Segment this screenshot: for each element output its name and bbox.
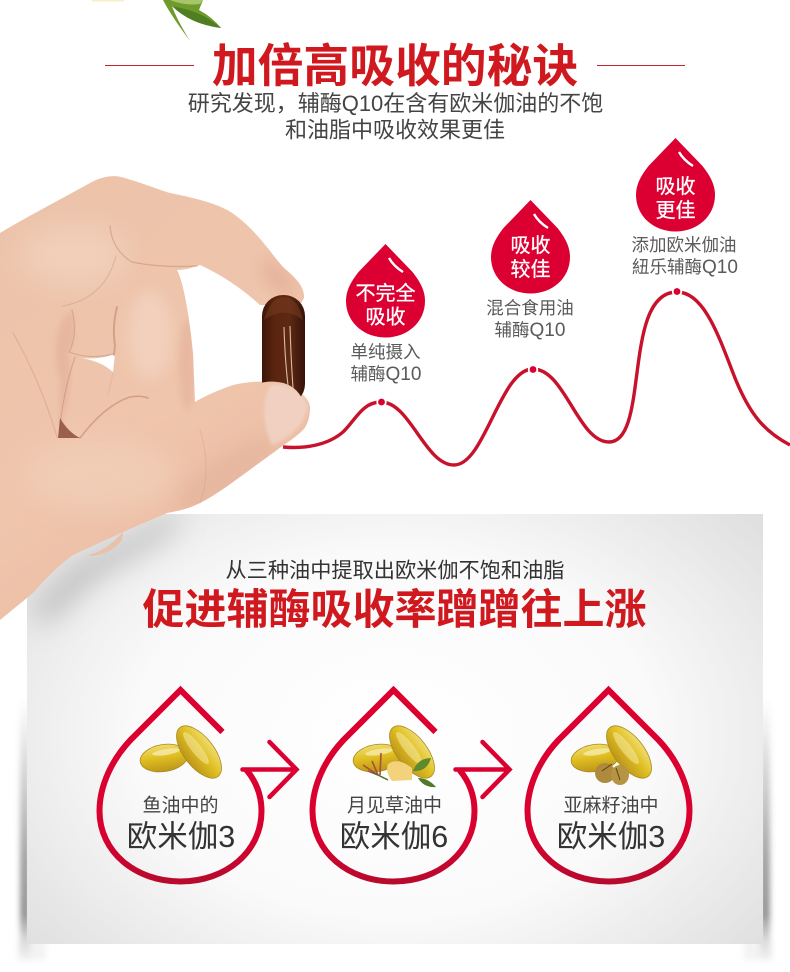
heading: absorption rises: 促进辅酶吸收率蹭蹭往上涨 bbox=[142, 586, 647, 633]
badge drop: better absorption: 较佳 bbox=[510, 258, 550, 281]
label: with omega oil bbox=[632, 235, 738, 278]
omega type: 欧米伽3 bbox=[557, 820, 665, 854]
badge drop: best absorption: 吸收 bbox=[656, 175, 696, 198]
label: plain coenzyme: 辅酶Q10 bbox=[351, 364, 421, 385]
omega type: 欧米伽6 bbox=[340, 820, 448, 854]
illustration: hand holding capsule bbox=[0, 176, 310, 620]
badge drop: incomplete absorption bbox=[346, 244, 425, 338]
icon: capsules bbox=[138, 718, 230, 786]
label: plain coenzyme bbox=[350, 342, 421, 385]
badge drop: best absorption bbox=[636, 138, 715, 232]
label: plain coenzyme: 单纯摄入 bbox=[350, 342, 420, 362]
icon: leaf at top bbox=[92, 0, 221, 41]
panel: flaxseed oil drop bbox=[528, 690, 690, 882]
title line left bbox=[105, 65, 194, 66]
title: 加倍高吸收的秘诀 bbox=[212, 41, 578, 92]
badge drop: incomplete absorption: 不完全 bbox=[356, 282, 416, 305]
palm fold shadow bbox=[58, 418, 80, 438]
marker: middle peak bbox=[528, 364, 538, 375]
oil name: 月见草油中 bbox=[347, 794, 442, 816]
capsule bbox=[262, 295, 305, 405]
subtitle: 和油脂中吸收效果更佳 bbox=[285, 118, 505, 142]
label: mixed with oil: 辅酶Q10 bbox=[495, 320, 565, 341]
label: mixed with oil bbox=[486, 298, 574, 341]
label: mixed with oil: 混合食用油 bbox=[486, 298, 574, 318]
arrow to flaxseed bbox=[456, 742, 510, 797]
badge drop: better absorption bbox=[491, 200, 570, 294]
omega type: 欧米伽3 bbox=[127, 820, 235, 854]
panel: fish oil drop bbox=[100, 690, 296, 882]
icon: capsules with flower bbox=[351, 718, 443, 787]
icon: capsules with walnuts bbox=[569, 718, 660, 786]
badge drop: best absorption: 更佳 bbox=[656, 199, 696, 222]
arrow to evening primrose bbox=[242, 742, 296, 797]
panel: omega oils background bbox=[18, 508, 772, 962]
badge drop: better absorption: 吸收 bbox=[510, 234, 550, 257]
label: with omega oil: 添加欧米伽油 bbox=[632, 235, 736, 255]
marker: high peak bbox=[672, 286, 682, 297]
label: with omega oil: 紐乐辅酶Q10 bbox=[632, 257, 738, 278]
text: three oils intro: 从三种油中提取出欧米伽不饱和油脂 bbox=[225, 558, 565, 582]
subtitle: 研究发现，辅酶Q10在含有欧米伽油的不饱 bbox=[188, 91, 603, 116]
finger creases bbox=[13, 226, 206, 503]
subtitle bbox=[188, 91, 603, 142]
panel: evening primrose oil drop bbox=[312, 690, 510, 882]
marker: low peak bbox=[376, 397, 387, 407]
gap between fingers bbox=[75, 354, 115, 372]
oil name: 亚麻籽油中 bbox=[563, 794, 659, 816]
oil name: 鱼油中的 bbox=[142, 794, 219, 816]
chart: absorption curve bbox=[283, 286, 790, 465]
badge drop: incomplete absorption: 吸收 bbox=[366, 306, 406, 328]
title line right bbox=[597, 65, 685, 66]
